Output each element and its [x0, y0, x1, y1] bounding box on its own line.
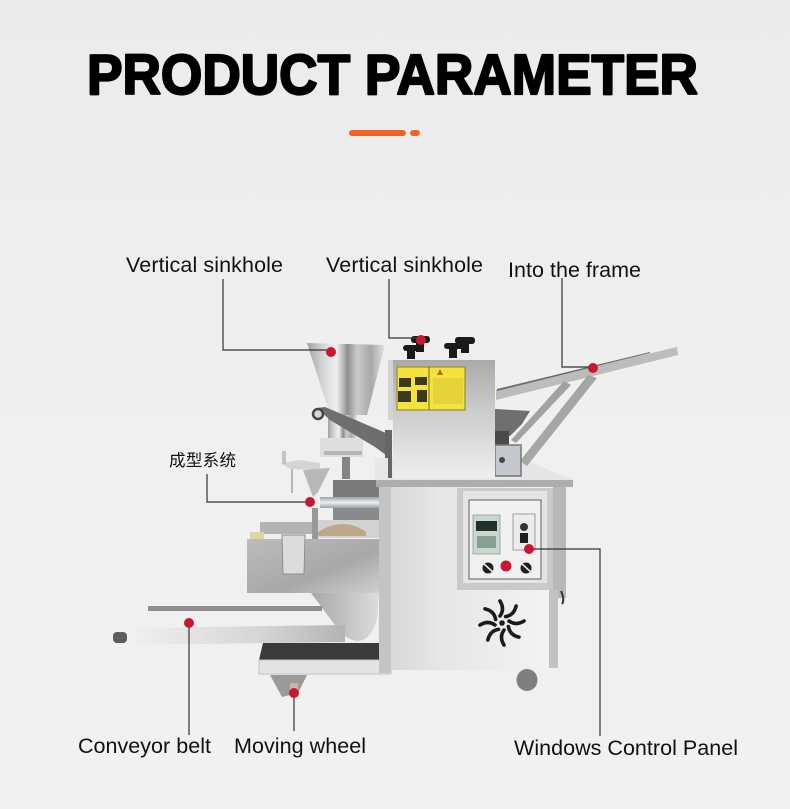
callout: conveyor belt: Conveyor belt	[78, 734, 211, 758]
machine base	[259, 643, 391, 674]
feed roller housing	[495, 409, 530, 476]
feed frame arms	[496, 347, 678, 466]
knobs	[403, 336, 475, 359]
callout: windows control panel	[514, 544, 738, 760]
callout: vertical sinkhole left: Vertical sinkhole	[126, 253, 283, 277]
callout: into the frame	[508, 258, 641, 373]
callout: vertical sinkhole left	[126, 253, 336, 357]
conveyor belt	[113, 625, 345, 645]
hopper lever	[313, 407, 392, 479]
callout: windows control panel: Windows Control Panel	[514, 736, 738, 760]
callout: vertical sinkhole right	[326, 253, 483, 345]
temperature controller	[473, 515, 500, 554]
table top	[374, 458, 573, 480]
conveyor rail	[148, 606, 322, 611]
warning label	[397, 367, 465, 410]
machine illustration	[113, 336, 678, 697]
title accent	[349, 130, 420, 136]
forming head	[281, 451, 380, 540]
chute	[311, 593, 379, 641]
callout: vertical sinkhole right: Vertical sinkhole	[326, 253, 483, 277]
timer module	[513, 514, 535, 550]
cabinet	[379, 487, 566, 673]
table edge	[376, 480, 573, 487]
callout: into the frame: Into the frame	[508, 258, 641, 282]
fan vent	[480, 601, 524, 645]
title: PRODUCT PARAMETER	[87, 43, 698, 107]
tray box	[247, 522, 379, 593]
control panel	[457, 488, 553, 590]
callout: conveyor belt	[78, 618, 211, 758]
front caster	[270, 675, 307, 697]
callout: moving wheel: Moving wheel	[234, 734, 366, 758]
callout: forming system: 成型系统	[169, 451, 236, 470]
callout: moving wheel	[234, 688, 366, 758]
upper housing	[388, 360, 495, 478]
hopper	[307, 343, 385, 479]
callout: forming system	[169, 451, 315, 507]
rear wheel	[516, 669, 538, 691]
switches	[482, 560, 532, 574]
